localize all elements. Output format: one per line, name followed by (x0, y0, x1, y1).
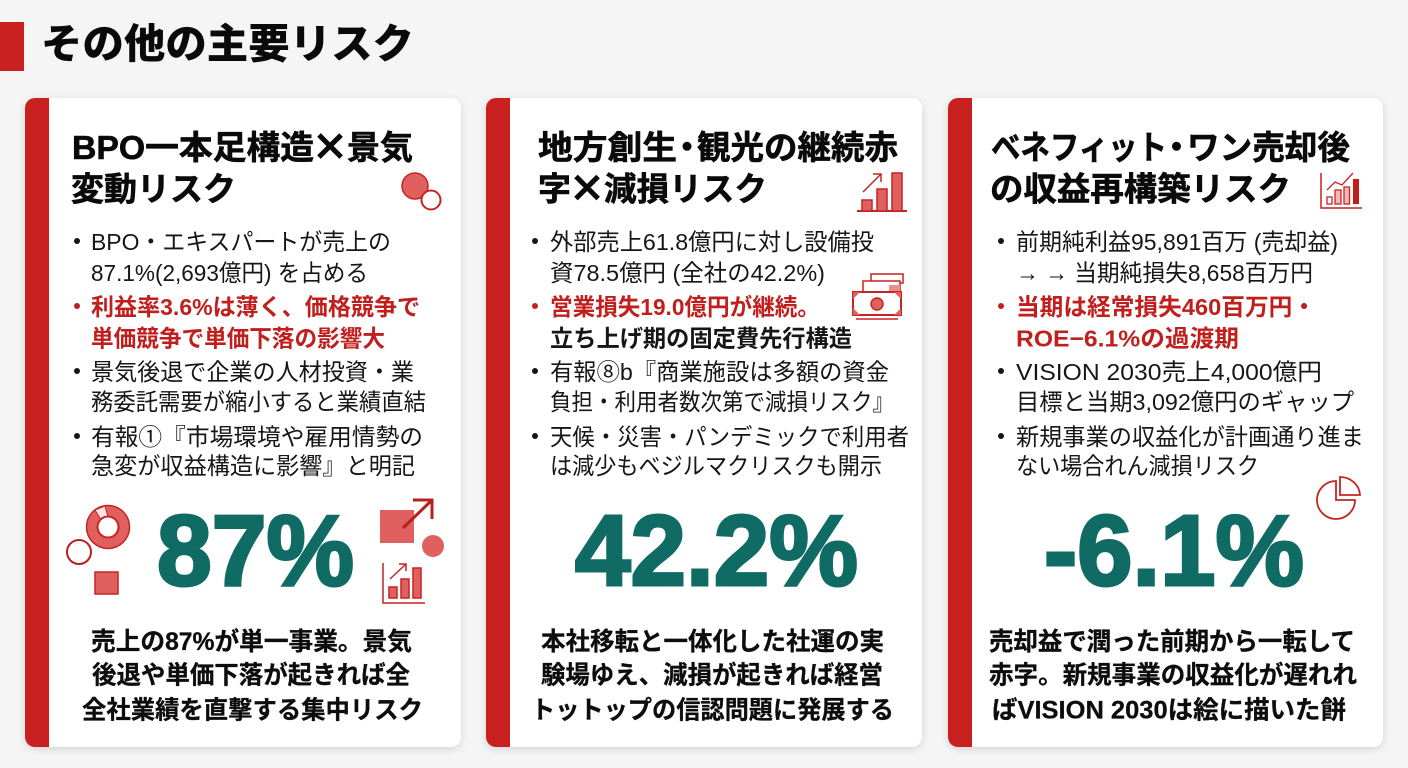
bullet list: ない場合れん減損リスク (1016, 453, 1259, 479)
bullet list: 有報①『市場環境や雇用情勢の (91, 424, 423, 450)
card background (948, 98, 1383, 747)
heading: ・ (670, 129, 704, 166)
bullet list: → → 当期純損失8,658百万円 (1016, 260, 1313, 286)
conclusion text: 本社移転と一体化した社運の実 (541, 628, 884, 656)
bullet list: 単価競争で単価下落の影響大 (91, 326, 385, 352)
conclusion text (989, 628, 1357, 724)
card background (25, 98, 461, 747)
panel: post-sale earnings risk (948, 98, 1383, 747)
bullet list: 87.1%(2,693億円) を占める (91, 260, 368, 286)
bullet list: 利益率3.6%は薄く、価格競争で (91, 294, 420, 320)
conclusion text: 売上の87%が単一事業。景気 (91, 627, 412, 656)
bullet list: 目標と当期3,092億円のギャップ (1016, 389, 1354, 415)
heading: 地方創生 (538, 129, 677, 166)
bullet list: 当期は経常損失460百万円・ (1016, 294, 1316, 320)
key figure: 87% (157, 495, 354, 607)
card accent stripe (486, 98, 510, 747)
bullet list: 天候・災害・パンデミックで利用者 (550, 424, 909, 450)
bullet list: 資78.5億円 (全社の42.2%) (550, 260, 825, 286)
conclusion text: 験場ゆえ、減損が起きれば経営 (541, 660, 883, 690)
bullet list: は減少もベジルマクリスクも開示 (550, 453, 882, 479)
bullet list: 前期純利益95,891百万 (売却益) (1016, 229, 1338, 255)
heading: × (571, 158, 603, 218)
bullet list: 景気後退で企業の人材投資・業 (91, 359, 414, 385)
bullet list: 営業損失19.0億円が継続。 (550, 293, 820, 320)
bullet list: 有報⑧b『商業施設は多額の資金 (550, 359, 889, 385)
page title: その他の主要リスク (41, 21, 414, 67)
icon group: square with arrow, bar chart (380, 500, 444, 603)
heading: 字 (538, 170, 571, 208)
bullet list: 務委託需要が縮小すると業績直結 (91, 389, 426, 415)
heading: BPO一本足構造 (72, 129, 314, 166)
heading: × (314, 116, 346, 176)
card background (486, 98, 922, 747)
heading: ワン売却後 (1187, 129, 1350, 166)
bullet list: BPO・エキスパートが売上の (91, 229, 391, 255)
bullet list (532, 229, 909, 479)
heading (990, 129, 1350, 208)
bullet list (74, 229, 426, 479)
conclusion text: 後退や単価下落が起きれば全 (92, 660, 410, 690)
icon: two circles (402, 173, 440, 210)
icon: line and bar chart (1321, 173, 1362, 208)
heading (538, 129, 898, 218)
key figure: -6.1% (1044, 495, 1304, 607)
card accent stripe (948, 98, 972, 747)
icon: pie chart (1317, 477, 1360, 519)
card accent stripe (25, 98, 49, 747)
title accent block (0, 22, 24, 71)
panel: regional tourism risk (486, 98, 922, 747)
conclusion text (82, 627, 423, 724)
bullet list: ROE−6.1%の過渡期 (1016, 326, 1239, 352)
conclusion text: 全社業績を直撃する集中リスク (82, 696, 423, 724)
heading: 変動リスク (71, 170, 236, 208)
key figure: 42.2% (575, 495, 858, 607)
bullet list: 負担・利用者数次第で減損リスク』 (550, 389, 894, 415)
heading: 景気 (347, 129, 413, 166)
bullet list: 外部売上61.8億円に対し設備投 (550, 229, 874, 255)
bullet list: VISION 2030売上4,000億円 (1016, 359, 1322, 385)
panel: BPO risk (25, 98, 461, 747)
heading: の収益再構築リスク (990, 170, 1291, 208)
heading: ベネフィット (991, 129, 1167, 166)
icon: banknotes (853, 274, 903, 319)
bullet list: 新規事業の収益化が計画通り進ま (1016, 424, 1364, 450)
bullet list: 急変が収益構造に影響』と明記 (91, 453, 415, 479)
heading: 減損リスク (604, 170, 767, 208)
conclusion text: 売却益で潤った前期から一転して (989, 628, 1355, 656)
conclusion text: トットップの信認問題に発展する (531, 696, 894, 724)
conclusion text (531, 628, 894, 724)
bullet list: 立ち上げ期の固定費先行構造 (550, 326, 852, 352)
heading (71, 116, 413, 208)
conclusion text: ばVISION 2030は絵に描いた餅 (992, 696, 1346, 724)
title bar (0, 21, 414, 71)
conclusion text: 赤字。新規事業の収益化が遅れれ (989, 660, 1357, 690)
icon: bar chart (857, 173, 907, 211)
heading: 観光の継続赤 (697, 129, 898, 166)
heading: ・ (1160, 129, 1193, 166)
bullet list (998, 229, 1364, 479)
icon group: donut, circle, square (67, 506, 130, 594)
